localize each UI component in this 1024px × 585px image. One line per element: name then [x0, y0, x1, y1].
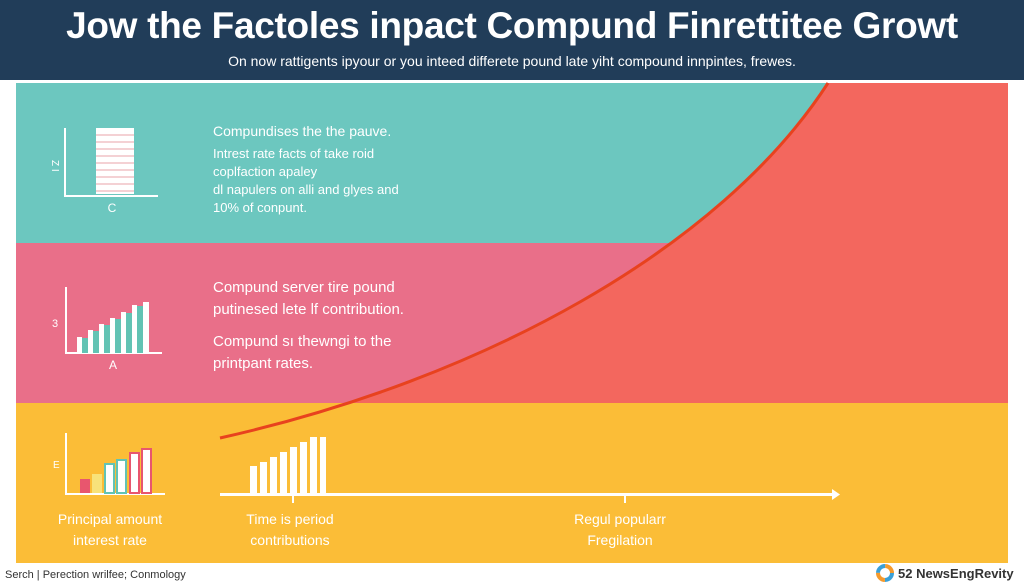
label: time: Time is period — [246, 511, 334, 527]
label: principal: Principal amount — [58, 511, 162, 527]
label: regular: Regul popularr — [574, 511, 666, 527]
panels and curve: C — [108, 201, 117, 215]
text block: pink: putinesed lete lf contribution. — [213, 301, 404, 318]
footer text: Serch | Perection wrilfee; Conmology — [5, 569, 186, 581]
subtitle: On now rattigents ipyour or you inteed differete pound late yiht compound innpintes, frewes. — [228, 53, 796, 69]
text block: pink: Compund sı thewngi to the — [213, 333, 391, 350]
panels and curve: Z I — [49, 160, 60, 172]
red growth area — [220, 83, 1008, 438]
growth curve — [220, 83, 828, 438]
header — [0, 0, 1024, 80]
text block: teal: dl napulers on alli and glyes and — [213, 182, 399, 197]
text block: teal: coplfaction apaley — [213, 164, 317, 179]
chart: pink bars — [52, 287, 162, 372]
label: principal: interest rate — [73, 532, 147, 548]
chart: pink bars: 3 — [52, 318, 58, 330]
text block: pink — [213, 279, 404, 372]
chart: yellow multi bars — [53, 433, 165, 494]
chart: teal stacked bar — [65, 128, 158, 196]
chart: pink bars: A — [109, 358, 117, 372]
label: regular — [574, 511, 666, 548]
label: time — [246, 511, 334, 548]
label: regular: Fregilation — [587, 532, 653, 548]
text block: pink: Compund server tire pound — [213, 279, 395, 296]
label: principal — [58, 511, 162, 548]
label: time: contributions — [250, 532, 330, 548]
text block: pink: printpant rates. — [213, 355, 313, 372]
timeline axis with bars — [220, 437, 840, 503]
text block: teal: 10% of conpunt. — [213, 200, 307, 215]
panel: pink — [16, 243, 1008, 403]
text block: teal: Compundises the the pauve. — [213, 123, 391, 139]
logo: 52 NewsEngRevity — [898, 566, 1014, 580]
title: Jow the Factoles inpact Compund Finrettitee Growt — [66, 5, 958, 46]
chart: yellow multi bars: E — [53, 460, 60, 471]
panel: teal — [16, 83, 1008, 243]
text block: teal: Intrest rate facts of take roid — [213, 146, 374, 161]
text block: teal — [213, 123, 399, 215]
panel: yellow — [16, 403, 1008, 563]
icon: logo mark — [876, 564, 894, 582]
